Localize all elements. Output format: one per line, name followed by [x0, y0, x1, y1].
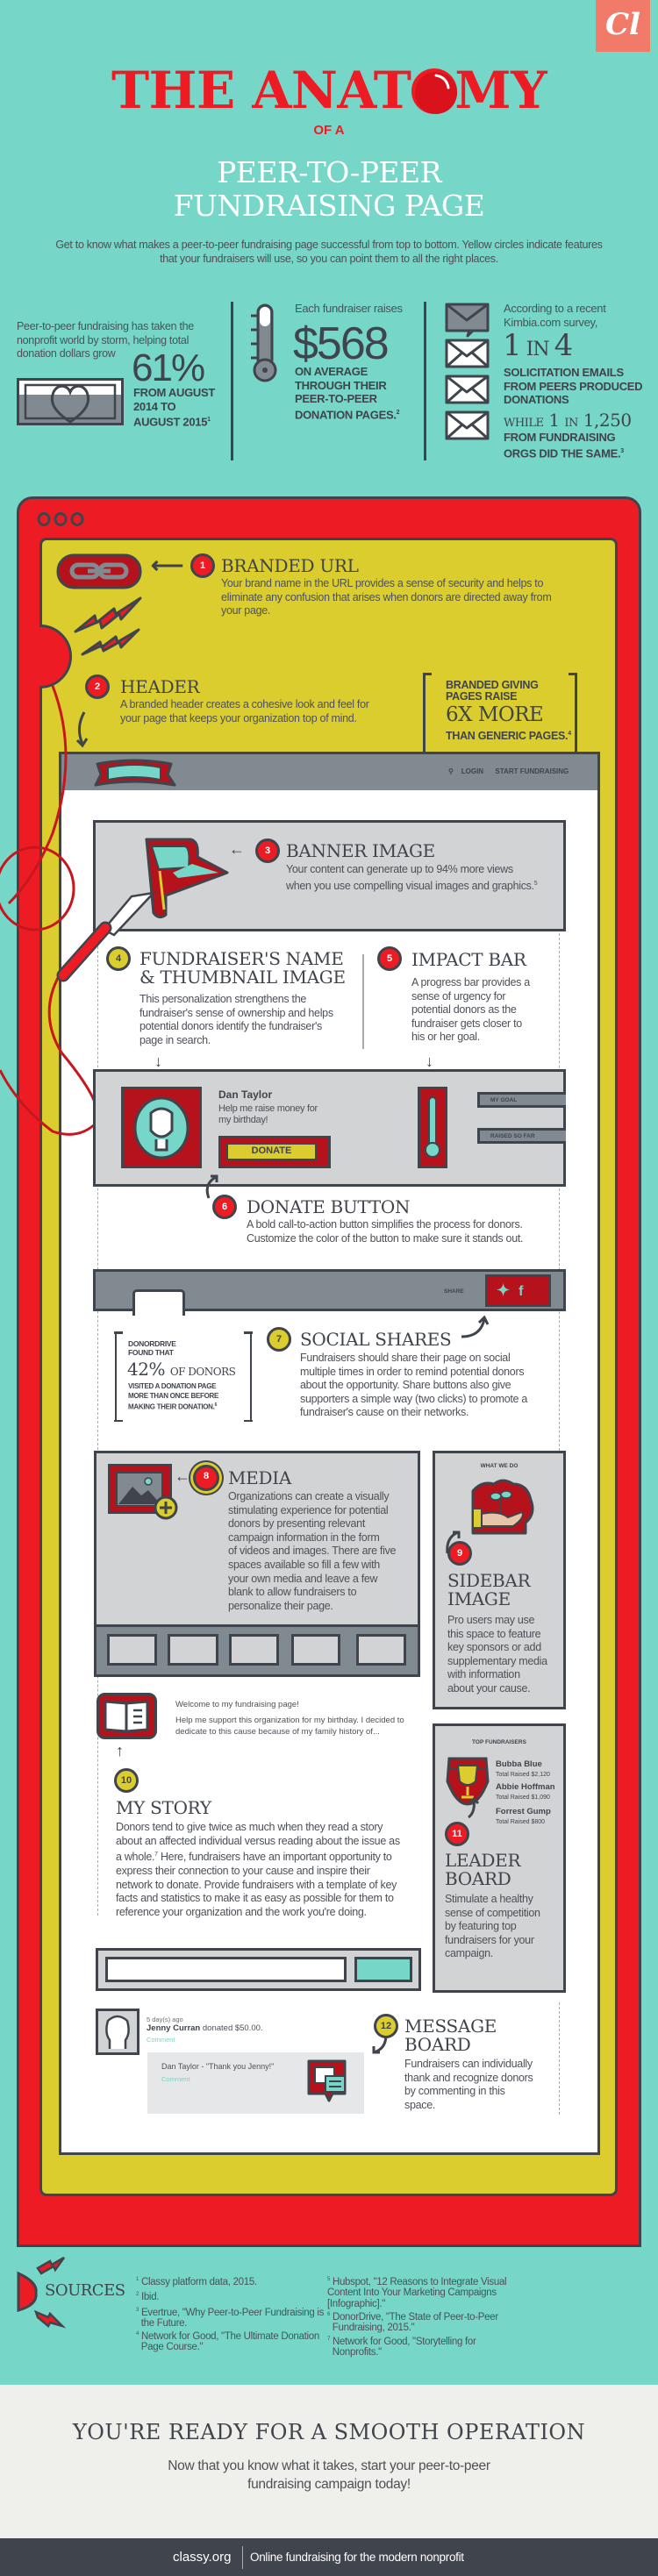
- panel: leader board: sense of competition: [445, 1907, 540, 1919]
- sources: 6 DonorDrive, "The State of Peer-to-Peer: [327, 2312, 498, 2323]
- panel: leader board: fundraisers for your: [445, 1934, 534, 1946]
- panel: banner image: ←: [229, 840, 245, 858]
- sources: Fundraising, 2015.": [333, 2323, 414, 2333]
- panel: media: campaign information in the form: [228, 1531, 379, 1544]
- stat: 61%: Peer-to-peer fundraising has taken the: [17, 320, 194, 332]
- section: donation message: Dan Taylor - "Thank you Jenny!": [161, 2062, 274, 2071]
- section 5: impact bar: 5: [387, 953, 392, 964]
- sources: the Future.: [141, 2318, 187, 2329]
- stat: 61%: AUGUST 20151: [133, 415, 211, 428]
- section 6: donate button: A bold call-to-action button simplifies the process for donors.: [247, 1218, 523, 1231]
- section 4: fundraiser's name: 4: [116, 953, 121, 964]
- stat: $568: [251, 302, 403, 421]
- stat: 1 in 4: [446, 302, 642, 460]
- panel: fundraiser profile: my birthday!: [218, 1114, 268, 1124]
- section 7: social shares: 7: [276, 1334, 282, 1345]
- subtitle small: OF A: [313, 123, 345, 138]
- section 1: branded url: your page.: [221, 604, 270, 617]
- section 10: my story: a whole.7 Here, fundraisers have an important opportunity to: [116, 1851, 392, 1863]
- stat: $568: ON AVERAGE: [295, 365, 368, 378]
- logo badge: Cl: [605, 7, 640, 42]
- panel: leader board: Bubba Blue: [496, 1759, 542, 1769]
- panel: leader board: Forrest Gump: [496, 1807, 551, 1816]
- panel: leader board: [433, 1723, 566, 1993]
- callout: 6x more: PAGES RAISE: [446, 690, 517, 703]
- stat: $568: PEER-TO-PEER: [295, 392, 377, 405]
- panel: media: personalize their page.: [228, 1600, 333, 1612]
- stat: 1 in 4: FROM FUNDRAISING: [504, 431, 615, 444]
- icon: image add: [108, 1464, 177, 1519]
- panel: banner image: BANNER IMAGE: [286, 840, 435, 861]
- arrows down: ↓: [154, 1053, 162, 1070]
- section 5: impact bar: A progress bar provides a: [411, 976, 530, 988]
- callout: 42% of donors: VISITED A DONATION PAGE: [128, 1382, 216, 1390]
- sources: 7 Network for Good, "Storytelling for: [327, 2337, 476, 2347]
- sources: 2 Ibid.: [136, 2292, 159, 2302]
- mock page white body: [59, 790, 600, 2155]
- stat: 61%: nonprofit world by storm, helping total: [17, 334, 189, 346]
- panel: sidebar image: WHAT WE DO: [481, 1463, 518, 1469]
- panel: sidebar image: [433, 1451, 566, 1709]
- panel: media: [94, 1451, 420, 1677]
- footer: Online fundraising for the modern nonprofit: [250, 2551, 464, 2564]
- section 10: my story: network to donate. Provide fundraisers with a template of key: [116, 1879, 397, 1891]
- icon: link: [56, 554, 142, 589]
- icon: social buttons: ✦ f: [497, 1281, 523, 1299]
- callout: 6x more: BRANDED GIVING: [446, 679, 539, 691]
- panel: media: blank to allow fundraisers to: [228, 1586, 356, 1598]
- section 5: impact bar: [377, 946, 530, 1043]
- icon: thermometer bar: [418, 1087, 447, 1168]
- section 7: social shares: multiple times in order to remind potential donors: [300, 1366, 524, 1378]
- panel: fundraiser profile: RAISED SO FAR: [490, 1133, 535, 1139]
- section 10: my story: Donors tend to give twice as much when they read a story: [116, 1821, 383, 1833]
- section 2: header: your page that keeps your organization top of mind.: [120, 712, 357, 724]
- stat: 61%: 2014 TO: [133, 400, 175, 412]
- stat: 61%: donation dollars grow: [17, 347, 116, 360]
- icon: red nose ball: [411, 68, 457, 114]
- stat: 61%: 61%: [132, 346, 204, 389]
- section 12: message board: BOARD: [404, 2034, 471, 2055]
- panel: fundraiser profile: [93, 1069, 566, 1187]
- stat: $568: Each fundraiser raises: [295, 302, 403, 315]
- section 4: fundraiser's name: This personalization strengthens the: [139, 993, 306, 1005]
- icon: flag: [146, 838, 229, 919]
- icon: lightning bolts: [74, 596, 142, 656]
- intro text: [55, 239, 603, 265]
- section 10: my story: about an affected individual versus reading about the issue as: [116, 1835, 400, 1847]
- donate button: [218, 1136, 331, 1168]
- section 1: branded url: [190, 553, 551, 617]
- section 7: social shares: about the opportunity. Share buttons also give: [300, 1379, 511, 1391]
- callout: 42% of donors: MAKING THEIR DONATION.6: [128, 1402, 217, 1411]
- section 10: my story: ↑: [116, 1742, 124, 1759]
- panel: media: stimulating experience for potential: [228, 1504, 388, 1516]
- closing text: Now that you know what it takes, start your peer-to-peer: [168, 2458, 490, 2473]
- section 5: impact bar: his or her goal.: [411, 1031, 480, 1043]
- panel: banner image: [93, 820, 566, 931]
- icon: envelopes: [446, 303, 490, 440]
- section 6: donate button: [205, 1175, 523, 1245]
- panel: sidebar image: key sponsors or add: [447, 1641, 541, 1653]
- icon: heart bill: [17, 378, 124, 425]
- section 1: branded url: BRANDED URL: [221, 555, 359, 576]
- panel: leader board: Total Raised $800: [496, 1819, 545, 1825]
- panel: leader board: Total Raised $1,090: [496, 1795, 550, 1801]
- panel: leader board: campaign.: [445, 1947, 493, 1959]
- section 5: impact bar: potential donors as the: [411, 1003, 517, 1016]
- divider: [424, 302, 426, 460]
- sources: 3 Evertrue, "Why Peer-to-Peer Fundraising is: [136, 2307, 324, 2317]
- callout: 42% of donors: FOUND THAT: [128, 1348, 174, 1357]
- panel: leader board: Stimulate a healthy: [445, 1893, 533, 1905]
- stat: 1 in 4: FROM PEERS PRODUCED: [504, 379, 642, 393]
- section 5: impact bar: sense of urgency for: [411, 990, 505, 1003]
- panel: sidebar image: supplementary media: [447, 1655, 547, 1667]
- section 10: my story: 10: [121, 1775, 132, 1786]
- panel: media: of videos and images. There are five: [228, 1545, 396, 1557]
- mock page header bar: ⚲ LOGIN START FUNDRAISING: [448, 767, 569, 775]
- donate button: DONATE: [252, 1145, 291, 1156]
- media thumbnails strip: [94, 1624, 420, 1677]
- sources: [18, 2256, 506, 2358]
- comment input box: [96, 1948, 421, 1991]
- section 12: message board: [372, 2014, 533, 2111]
- callout: 42% of donors: [115, 1331, 252, 1422]
- callout: 42% of donors: DONORDRIVE: [128, 1339, 176, 1348]
- icon: book: [97, 1693, 157, 1739]
- section 10: my story: dedicate to this cause because of my family history of...: [175, 1727, 380, 1737]
- closing text: fundraising campaign today!: [247, 2477, 411, 2492]
- panel: leader board: BOARD: [445, 1868, 511, 1889]
- panel: leader board: Total Raised $2,120: [496, 1772, 550, 1778]
- section 7: social shares: [267, 1327, 528, 1418]
- text: ↓: [426, 1053, 433, 1070]
- sources: 4 Network for Good, "The Ultimate Donation: [136, 2331, 319, 2342]
- section 12: message board: space.: [404, 2099, 435, 2111]
- stat: 1 in 4: ORGS DID THE SAME.3: [504, 446, 624, 460]
- stat: 1 in 4: DONATIONS: [504, 393, 569, 406]
- decorative red cord and tweezers: [0, 686, 156, 1136]
- panel: sidebar image: this space to feature: [447, 1628, 540, 1640]
- section: donation message: Comment: [161, 2075, 190, 2083]
- footer: [0, 2538, 658, 2576]
- section: donation message: Comment: [147, 2036, 175, 2044]
- section 7: social shares: supporters a simple way (two clicks) to promote a: [300, 1393, 527, 1405]
- sources: Page Course.": [141, 2342, 203, 2352]
- intro text: that your fundraisers will use, so you can point them to all the right places.: [160, 253, 498, 265]
- panel: sidebar image: 9: [457, 1548, 462, 1559]
- panel: leader board: 11: [452, 1829, 462, 1839]
- section 10: my story: [97, 1693, 404, 1918]
- section 7: social shares: fundraiser's cause on their networks.: [300, 1406, 468, 1418]
- yellow canvas: [39, 538, 618, 2196]
- section 1: branded url: eliminate any confusion that arises when donors are directed away from: [221, 591, 551, 603]
- arrow: curved down to header: [76, 711, 88, 747]
- icon: donor avatar: [96, 2009, 139, 2055]
- stat: 1 in 4: According to a recent: [504, 302, 606, 315]
- subtitle: PEER-TO-PEER: [217, 155, 441, 189]
- sources: Nonprofits.": [333, 2347, 382, 2358]
- icon: sources nose and bolts: [18, 2256, 67, 2328]
- panel: leader board: TOP FUNDRAISERS: [472, 1739, 526, 1745]
- panel: media: 8: [204, 1471, 209, 1481]
- decorative red semicircle: [39, 624, 72, 689]
- section: donation message: [96, 2009, 364, 2114]
- section 2: header: 2: [95, 681, 100, 692]
- panel: sidebar image: about your cause.: [447, 1682, 530, 1695]
- icon: trophy: [446, 1758, 490, 1805]
- panel: sidebar image: SIDEBAR: [447, 1570, 530, 1591]
- closing heading: YOU'RE READY FOR A SMOOTH OPERATION: [73, 2420, 585, 2444]
- subtitle: FUNDRAISING PAGE: [174, 189, 484, 223]
- intro text: Get to know what makes a peer-to-peer fundraising page successful from top to bottom. Yellow circles indicate features: [55, 239, 603, 251]
- panel: fundraiser profile: Help me raise money for: [218, 1103, 318, 1114]
- section 6: donate button: DONATE BUTTON: [247, 1196, 410, 1217]
- panel: media: MEDIA: [228, 1467, 291, 1488]
- section 5: impact bar: fundraiser gets closer to: [411, 1017, 522, 1030]
- section 4: fundraiser's name: & THUMBNAIL IMAGE: [139, 967, 346, 988]
- arrow: to link: ⟵: [151, 552, 183, 578]
- panel: banner image: 3: [265, 846, 270, 856]
- panel: media: donors by presenting relevant: [228, 1517, 365, 1530]
- panel: sidebar image: Pro users may use: [447, 1614, 534, 1626]
- stat: 61%: FROM AUGUST: [133, 386, 215, 399]
- section: donation message: Jenny Curran donated $50.00.: [147, 2023, 263, 2033]
- section 4: fundraiser's name: FUNDRAISER'S NAME: [139, 948, 344, 969]
- section 7: social shares: Fundraisers should share their page on social: [300, 1352, 510, 1364]
- section 10: my story: Help me support this organization for my birthday. I decided to: [175, 1716, 404, 1725]
- closing text: [168, 2458, 490, 2492]
- panel: fundraiser profile: MY GOAL: [490, 1097, 517, 1103]
- panel: leader board: Abbie Hoffman: [496, 1782, 555, 1792]
- panel: media: ←: [175, 1467, 190, 1485]
- section 1: branded url: 1: [200, 560, 205, 571]
- stat: $568: $568: [293, 318, 388, 369]
- section 2: header: HEADER: [120, 676, 199, 697]
- section 4: fundraiser's name: page in search.: [139, 1034, 211, 1046]
- section 4: fundraiser's name: fundraiser's sense of ownership and helps: [139, 1007, 333, 1019]
- arrow: to share: [461, 1316, 490, 1338]
- panel: media: spaces available so fill a few with: [228, 1559, 380, 1571]
- section 12: message board: thank and recognize donors: [404, 2072, 533, 2084]
- sources: [Infographic].": [327, 2299, 385, 2309]
- stat: 1 in 4: 1 IN 4: [503, 328, 572, 363]
- stat: 1 in 4: SOLICITATION EMAILS: [504, 366, 624, 379]
- section 4: fundraiser's name: [106, 946, 346, 1046]
- section 10: my story: facts and statistics to make it as easy as possible for them to: [116, 1892, 394, 1904]
- stat: 1 in 4: Kimbia.com survey,: [504, 316, 597, 328]
- stat: $568: DONATION PAGES.2: [295, 408, 399, 421]
- dashed guides: [97, 933, 98, 1916]
- stat: 61%: [17, 320, 216, 428]
- section 12: message board: MESSAGE: [404, 2016, 497, 2037]
- section: donation message: 5 day(s) ago: [147, 2016, 183, 2023]
- section 7: social shares: SOCIAL SHARES: [300, 1329, 451, 1350]
- section 2: header: A branded header creates a cohesive look and feel for: [120, 698, 369, 710]
- closing band: [0, 2385, 658, 2539]
- callout: 6x more: [423, 673, 577, 753]
- section 10: my story: MY STORY: [116, 1797, 211, 1818]
- sources: 5 Hubspot, "12 Reasons to Integrate Visual: [327, 2277, 506, 2287]
- sources: 1 Classy platform data, 2015.: [136, 2277, 257, 2287]
- subtitle: [174, 155, 484, 223]
- browser dots: [37, 512, 84, 526]
- sources: Content Into Your Marketing Campaigns: [327, 2287, 497, 2298]
- icon: social buttons: [485, 1274, 551, 1307]
- sources: SOURCES: [45, 2281, 125, 2300]
- divider: [231, 302, 233, 460]
- section 10: my story: express their connection to your cause and inspire their: [116, 1865, 370, 1877]
- panel: sidebar image: IMAGE: [447, 1588, 511, 1609]
- title: THE ANATOMY: [111, 61, 547, 120]
- panel: leader board: by featuring top: [445, 1920, 516, 1932]
- callout: 6x more: THAN GENERIC PAGES.4: [446, 730, 571, 742]
- section 4: fundraiser's name: potential donors identify the fundraiser's: [139, 1020, 322, 1032]
- icon: thermometer: [251, 303, 277, 382]
- section 1: branded url: Your brand name in the URL provides a sense of security and helps to: [221, 577, 543, 589]
- panel: fundraiser profile: Dan Taylor: [218, 1088, 272, 1101]
- icon: avatar: [121, 1087, 202, 1168]
- panel: sidebar image: with information: [447, 1668, 520, 1680]
- panel: share bar: [93, 1269, 566, 1311]
- panel: banner image: when you use compelling visual images and graphics.5: [286, 880, 537, 892]
- section 5: impact bar: IMPACT BAR: [411, 949, 526, 970]
- panel: leader board: LEADER: [445, 1850, 520, 1871]
- callout: 6x more: 6X MORE: [446, 703, 543, 726]
- section 2: header: [85, 674, 369, 724]
- mock page header bar: [59, 752, 600, 793]
- callout: 42% of donors: 42% OF DONORS: [127, 1359, 235, 1380]
- panel: banner image: Your content can generate up to 94% more views: [286, 863, 513, 875]
- footer: classy.org: [173, 2550, 231, 2565]
- icon: hand with plant: [472, 1479, 533, 1535]
- panel: media: your own media and leave a few: [228, 1573, 377, 1585]
- section 12: message board: 12: [381, 2021, 391, 2031]
- section 10: my story: Welcome to my fundraising page!: [175, 1700, 299, 1709]
- section 6: donate button: Customize the color of the button to make sure it stands out.: [247, 1232, 523, 1245]
- browser frame: [17, 496, 641, 2247]
- section 12: message board: Fundraisers can individually: [404, 2058, 533, 2070]
- panel: share bar: SHARE: [444, 1288, 464, 1295]
- section 6: donate button: 6: [222, 1202, 227, 1212]
- section 12: message board: by commenting in this: [404, 2085, 505, 2097]
- logo badge: [596, 0, 650, 52]
- icon: chat bubbles: [307, 2059, 346, 2102]
- stat: 1 in 4: WHILE 1 IN 1,250: [504, 410, 632, 431]
- icon: header ribbon logo: [95, 760, 175, 786]
- stats row: [17, 302, 642, 460]
- panel: media: Organizations can create a visually: [228, 1490, 389, 1502]
- callout: 42% of donors: MORE THAN ONCE BEFORE: [128, 1392, 218, 1400]
- section 10: my story: reference your organization and the work you're doing.: [116, 1906, 367, 1918]
- stat: $568: THROUGH THEIR: [295, 379, 386, 391]
